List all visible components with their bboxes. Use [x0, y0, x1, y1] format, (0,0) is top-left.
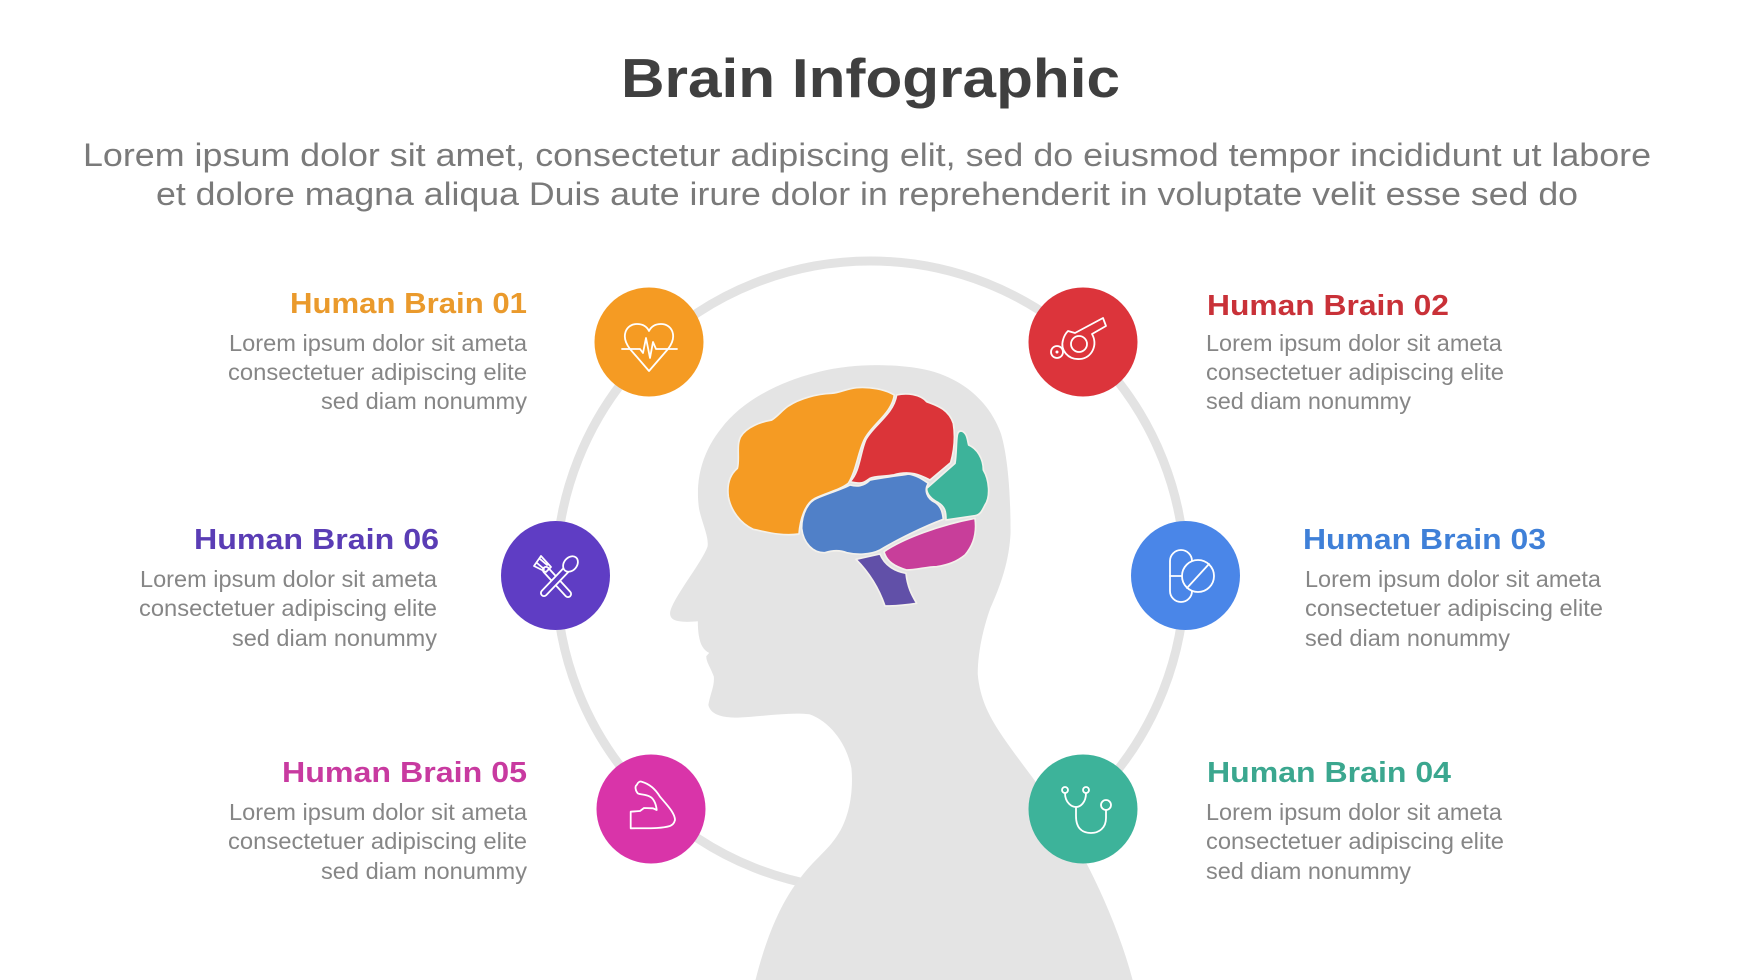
text block 02: sed diam nonummy	[1206, 388, 1412, 414]
text block 06: sed diam nonummy	[232, 625, 438, 651]
brain lobe blue	[802, 474, 943, 554]
text block 03: Lorem ipsum dolor sit ameta	[1305, 566, 1601, 592]
text block 05	[228, 757, 528, 884]
text block 02: Lorem ipsum dolor sit ameta	[1206, 330, 1502, 356]
brain illustration	[728, 387, 989, 606]
text block 05: sed diam nonummy	[321, 858, 528, 884]
text block 03: sed diam nonummy	[1305, 625, 1511, 651]
title: Brain Infographic	[621, 47, 1120, 109]
node 05: muscle icon	[596, 754, 706, 864]
text block 05: Lorem ipsum dolor sit ameta	[229, 799, 527, 825]
subtitle text: Lorem ipsum dolor sit amet, consectetur adipiscing elit, sed do eiusmod tempor incididunt ut labore	[83, 137, 1651, 173]
brain lobe magenta	[884, 518, 976, 570]
node 04: stethoscope icon	[1028, 754, 1138, 864]
brain lobe orange	[728, 387, 894, 535]
node 06: fork and spoon icon	[501, 521, 610, 630]
text block 01	[228, 288, 528, 414]
subtitle text: et dolore magna aliqua Duis aute irure dolor in reprehenderit in voluptate velit esse sed do	[156, 176, 1578, 212]
text block 01: Human Brain 01	[290, 288, 527, 320]
node 02: whistle icon	[1028, 288, 1138, 396]
ring around head	[556, 261, 1185, 890]
brain stem	[856, 554, 917, 606]
text block 05: Human Brain 05	[282, 757, 527, 789]
text block 01: consectetuer adipiscing elite	[228, 359, 527, 385]
text block 06: Lorem ipsum dolor sit ameta	[140, 566, 437, 592]
head silhouette	[670, 365, 1133, 980]
text block 02: Human Brain 02	[1207, 290, 1449, 322]
text block 04: consectetuer adipiscing elite	[1206, 828, 1504, 854]
text block 06: consectetuer adipiscing elite	[139, 595, 437, 621]
subtitle text	[83, 137, 1651, 212]
node 01: heart icon	[594, 288, 704, 396]
text block 04: Human Brain 04	[1207, 757, 1451, 789]
text block 01: sed diam nonummy	[321, 388, 528, 414]
text block 06: Human Brain 06	[194, 524, 439, 556]
text block 04: sed diam nonummy	[1206, 858, 1412, 884]
text block 06	[139, 524, 439, 651]
text block 04	[1206, 757, 1504, 884]
text block 03: consectetuer adipiscing elite	[1305, 595, 1603, 621]
text block 01: Lorem ipsum dolor sit ameta	[229, 330, 527, 356]
text block 05: consectetuer adipiscing elite	[228, 828, 527, 854]
node 03: pills icon	[1131, 521, 1240, 630]
brain lobe teal	[927, 431, 989, 520]
text block 02	[1206, 290, 1504, 414]
text block 02: consectetuer adipiscing elite	[1206, 359, 1504, 385]
brain lobe red	[850, 394, 954, 483]
text block 03: Human Brain 03	[1303, 524, 1546, 556]
text block 04: Lorem ipsum dolor sit ameta	[1206, 799, 1502, 825]
text block 03	[1303, 524, 1603, 651]
